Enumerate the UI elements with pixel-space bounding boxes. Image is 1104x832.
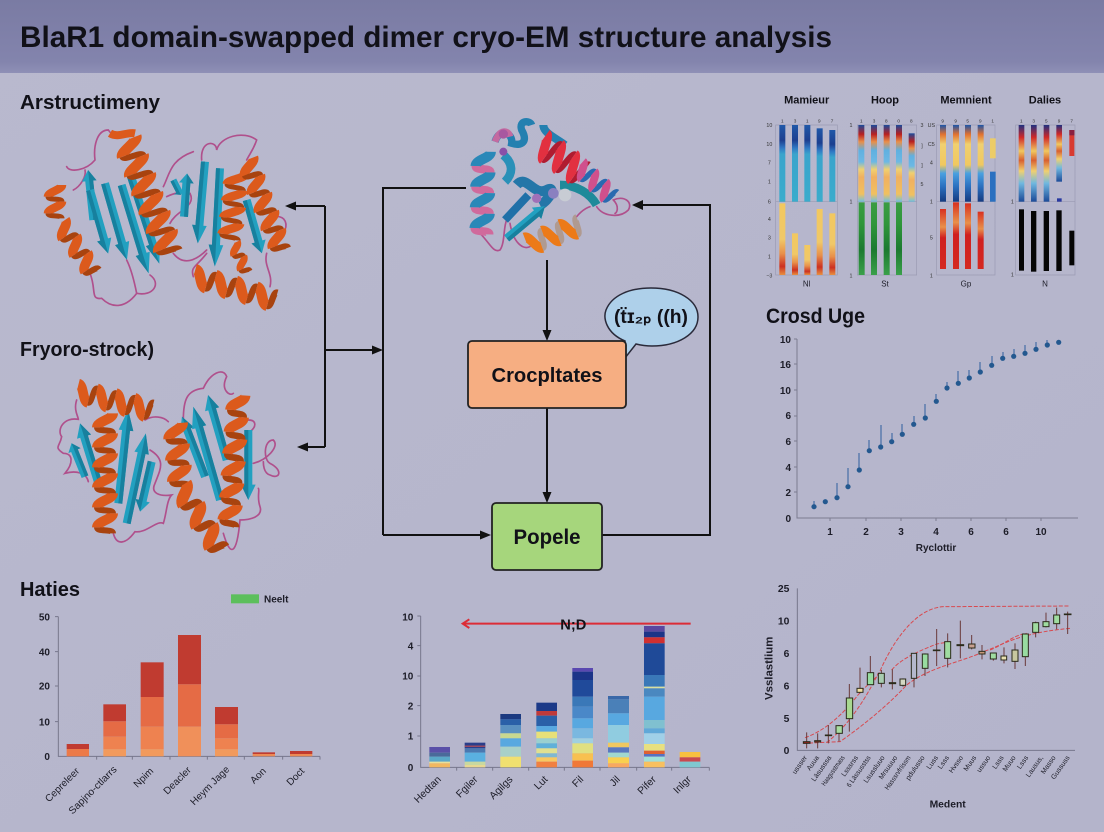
y axis labels	[39, 612, 50, 763]
y axis labels: 50	[39, 612, 50, 623]
heatmap panel: Hoop: ]	[921, 163, 923, 169]
heatmap panel: Memnient: 5	[966, 119, 969, 124]
candle bodies	[803, 614, 1071, 743]
bars	[67, 635, 312, 756]
y axis labels: 0	[408, 763, 414, 774]
x axis labels	[412, 774, 694, 806]
heatmap panel: Dalies: 1	[1011, 273, 1014, 279]
x axis labels: Fil	[571, 774, 586, 790]
heatmap strip charts	[766, 94, 1075, 289]
x axis labels: Gussuss	[1050, 754, 1072, 781]
heatmap panel: Memnient: Memnient	[940, 94, 992, 106]
heatmap panel: Dalies: 5	[1045, 119, 1048, 124]
x axis labels: 6	[968, 527, 974, 538]
heatmap panel: Mamieur: 1	[781, 119, 784, 124]
arrow: to upper dimer	[285, 202, 325, 210]
x axis labels: Mrsuuuo	[878, 755, 899, 781]
heading: Arstructimeny: Arstructimeny	[20, 92, 161, 114]
x axis labels: Haagusstmass	[821, 754, 847, 787]
y axis labels: 10	[778, 617, 790, 628]
x axis labels: ussser	[791, 754, 809, 776]
heatmap panel: Mamieur: 1	[768, 180, 771, 186]
heatmap panel: Mamieur: 10	[766, 142, 772, 148]
heatmap panel: Memnient: 1	[930, 273, 933, 279]
heading: Crosd Uge: Crosd Uge	[766, 305, 865, 328]
x axis labels	[827, 527, 1047, 538]
protein structure: central monomer	[474, 122, 630, 252]
box: Crocpltates	[468, 341, 626, 408]
candlestick chart	[764, 584, 1075, 811]
x axis labels: Jil	[608, 774, 623, 789]
heatmap panel: Mamieur: 7	[768, 161, 771, 167]
y axis labels	[780, 335, 791, 525]
x axis labels: 6	[1003, 527, 1009, 538]
y axis labels: 5	[784, 714, 790, 725]
wicks	[807, 608, 1068, 748]
x axis labels: Heym Jage	[189, 764, 232, 808]
legend: Neelt	[264, 595, 289, 606]
heading: Fryoro-strock: Fryoro-strock)	[20, 339, 154, 361]
heatmap panel: Mamieur: 4	[768, 217, 771, 223]
arrow: to Popele box	[383, 530, 491, 540]
x axis labels: pdulusso	[905, 755, 927, 782]
heatmap panel: Mamieur: 1	[806, 119, 809, 124]
heatmap panel: Hoop: ]	[921, 144, 923, 150]
y axis labels: 6	[784, 681, 790, 692]
y axis labels: 0	[784, 746, 790, 757]
box: Crocpltates: Crocpltates	[492, 365, 602, 387]
x axis labels: Lausus,	[1025, 755, 1045, 779]
y axis labels: 1	[408, 732, 414, 743]
callout bubble	[605, 288, 698, 358]
error bars	[814, 340, 1047, 507]
y axis labels: 2	[785, 488, 791, 499]
x axis labels: Doct	[285, 766, 307, 788]
heatmap panel: Mamieur: 7	[831, 119, 834, 124]
y axis labels: 25	[778, 584, 790, 595]
y axis labels	[402, 613, 414, 774]
y axis labels: 2	[408, 701, 414, 712]
heatmap panel: Hoop: 1	[850, 123, 853, 129]
x axis labels: Deacler	[162, 765, 194, 797]
x axis labels: Lsss	[937, 754, 951, 771]
heatmap panel: Hoop: 1	[850, 199, 853, 205]
data points	[811, 340, 1061, 509]
y axis labels: 10	[402, 613, 414, 624]
heatmap panel: Hoop: 1	[850, 273, 853, 279]
x axis labels: ussuo	[976, 755, 992, 774]
heatmap panel: Mamieur: 3	[768, 235, 771, 241]
y axis labels: 10	[780, 386, 791, 397]
x axis labels	[43, 764, 307, 817]
heatmap panel: Mamieur: −3	[766, 273, 772, 279]
x axis labels: Lsussluuo	[863, 755, 887, 785]
arrow: Crocpltates to Popele	[542, 408, 552, 503]
box: Popele	[492, 503, 602, 570]
heatmap panel: Hoop: Hoop	[871, 94, 899, 106]
x axis labels: 10	[1035, 527, 1047, 538]
x axis labels: Aon	[248, 766, 269, 786]
x axis labels: Fgiler	[454, 774, 481, 800]
x axis labels	[791, 754, 1072, 792]
heatmap panel: Mamieur	[766, 94, 837, 289]
scatter chart	[780, 335, 1078, 554]
protein structure: upper dimer	[48, 130, 288, 308]
heatmap panel: Hoop: 8	[885, 119, 888, 124]
red arrow	[463, 619, 691, 628]
heatmap panel: Dalies: N	[1042, 280, 1048, 289]
heatmap panel: Hoop: 3	[921, 123, 924, 129]
heatmap panel: Memnient: Gp	[961, 280, 972, 289]
heatmap panel: Memnient: C5	[928, 142, 935, 148]
x axis labels: Auua	[806, 755, 821, 772]
heatmap panel: Dalies: 1	[1011, 199, 1014, 205]
legend	[231, 594, 289, 606]
x axis labels: Inlgr	[672, 774, 694, 796]
heatmap panel: Mamieur: 6	[768, 199, 771, 205]
header band	[0, 0, 1104, 73]
arrow: to lower dimer	[297, 442, 325, 452]
x axis labels: 2	[863, 527, 869, 538]
heatmap panel: Dalies: 7	[1070, 119, 1073, 124]
y axis title: Vsslastlium	[764, 636, 776, 700]
x axis labels: Lsss	[992, 754, 1006, 771]
stacked bar chart: multicolour	[402, 613, 709, 806]
x axis labels: Npim	[132, 766, 156, 790]
x axis labels: Lāsusssa	[811, 755, 833, 783]
y axis labels: 16	[780, 360, 791, 371]
heatmap panel: Mamieur: 10	[766, 123, 772, 129]
heatmap panel: Hoop: St	[881, 280, 890, 289]
x axis labels: Luss	[926, 754, 940, 771]
heatmap panel: Dalies: 1	[1020, 119, 1023, 124]
x axis labels: 4	[933, 527, 939, 538]
y axis labels: 6	[785, 411, 791, 422]
arrow: monomer to Crocpltates	[542, 260, 552, 341]
heatmap panel: Memnient	[928, 94, 996, 289]
x axis labels: Cepreleer	[43, 766, 83, 805]
heatmap panel: Mamieur: Nl	[803, 280, 811, 289]
callout bubble: (ẗɪ₂ₚ ((h)	[614, 307, 688, 328]
title: BlaR1 domain-swapped dimer cryo-EM structure analysis	[20, 21, 832, 54]
heatmap panel: Memnient: 1	[991, 119, 994, 124]
heatmap panel: Mamieur: 1	[768, 254, 771, 260]
connector: central loop and monomer	[383, 188, 466, 535]
y axis labels: 4	[408, 641, 414, 652]
y axis labels: 40	[39, 647, 50, 658]
heatmap panel: Memnient: 9	[954, 119, 957, 124]
x axis labels: Lsss	[1016, 754, 1031, 771]
heatmap panel: Mamieur: 3	[794, 119, 797, 124]
x axis labels: 6 Lāssusstss	[846, 754, 873, 789]
x axis title: Medent	[930, 800, 966, 811]
x axis labels: Lut	[533, 774, 551, 792]
x axis labels: Muuo	[1002, 755, 1018, 773]
x axis labels: 3	[898, 527, 904, 538]
y axis labels: 6	[784, 649, 790, 660]
y axis labels: 0	[44, 752, 50, 763]
y axis labels	[778, 584, 790, 757]
y axis labels: 20	[39, 682, 50, 693]
y axis labels: 10	[780, 335, 791, 346]
x axis labels: Hedtan	[412, 774, 444, 806]
heatmap panel: Hoop	[850, 94, 924, 289]
y axis labels: 6	[785, 437, 791, 448]
heatmap panel: Memnient: 5	[930, 235, 933, 241]
x axis labels: Lsssrss	[841, 754, 860, 778]
flow connectors	[285, 188, 710, 540]
protein structure: lower dimer	[58, 372, 279, 555]
dashed envelope curves	[803, 606, 1070, 743]
heatmap panel: Hoop: 1	[860, 119, 863, 124]
x axis labels: Masso	[1040, 755, 1058, 776]
heatmap panel: Mamieur: Mamieur	[784, 94, 830, 106]
x axis labels: 1	[827, 527, 833, 538]
arrow label: N;D	[560, 617, 586, 633]
heatmap panel: Memnient: 4	[930, 161, 933, 167]
heatmap panel: Dalies	[1011, 94, 1075, 289]
x axis labels: Pifer	[636, 774, 659, 797]
stacked bar chart: orange	[39, 594, 320, 817]
heatmap panel: Memnient: 1	[930, 199, 933, 205]
heatmap panel: Hoop: 5	[921, 182, 924, 188]
heatmap panel: Dalies: 3	[1032, 119, 1035, 124]
heatmap panel: Hoop: 0	[897, 119, 900, 124]
x axis title: Ryclottir	[916, 543, 956, 554]
heatmap panel: Memnient: 9	[941, 119, 944, 124]
heatmap panel: Hoop: 3	[873, 119, 876, 124]
x axis labels: Hasssrvfrlissm	[884, 755, 913, 792]
box: Popele: Popele	[514, 526, 580, 549]
connector: left bracket	[324, 206, 326, 447]
x axis labels: Muus	[963, 754, 979, 773]
heading: Haties: Haties	[20, 579, 80, 601]
y axis labels: 4	[785, 463, 791, 474]
x axis labels: Agilgs	[488, 774, 515, 802]
heatmap panel: Memnient: US	[928, 123, 935, 129]
y axis labels: 10	[39, 717, 50, 728]
arrow: to central loop	[325, 346, 383, 354]
heatmap panel: Dalies: 9	[1058, 119, 1061, 124]
heatmap panel: Hoop: 8	[910, 119, 913, 124]
heatmap panel: Dalies: Dalies	[1029, 94, 1061, 106]
arrow: feedback to monomer	[602, 200, 710, 535]
heatmap panel: Memnient: 9	[979, 119, 982, 124]
y axis labels: 0	[785, 514, 791, 525]
x axis labels: Sapjno-ctlarrs	[67, 764, 119, 817]
bars	[429, 626, 700, 767]
y axis labels: 10	[402, 672, 414, 683]
x axis labels: Hvsso	[948, 755, 965, 775]
heatmap panel: Mamieur: 9	[818, 119, 821, 124]
